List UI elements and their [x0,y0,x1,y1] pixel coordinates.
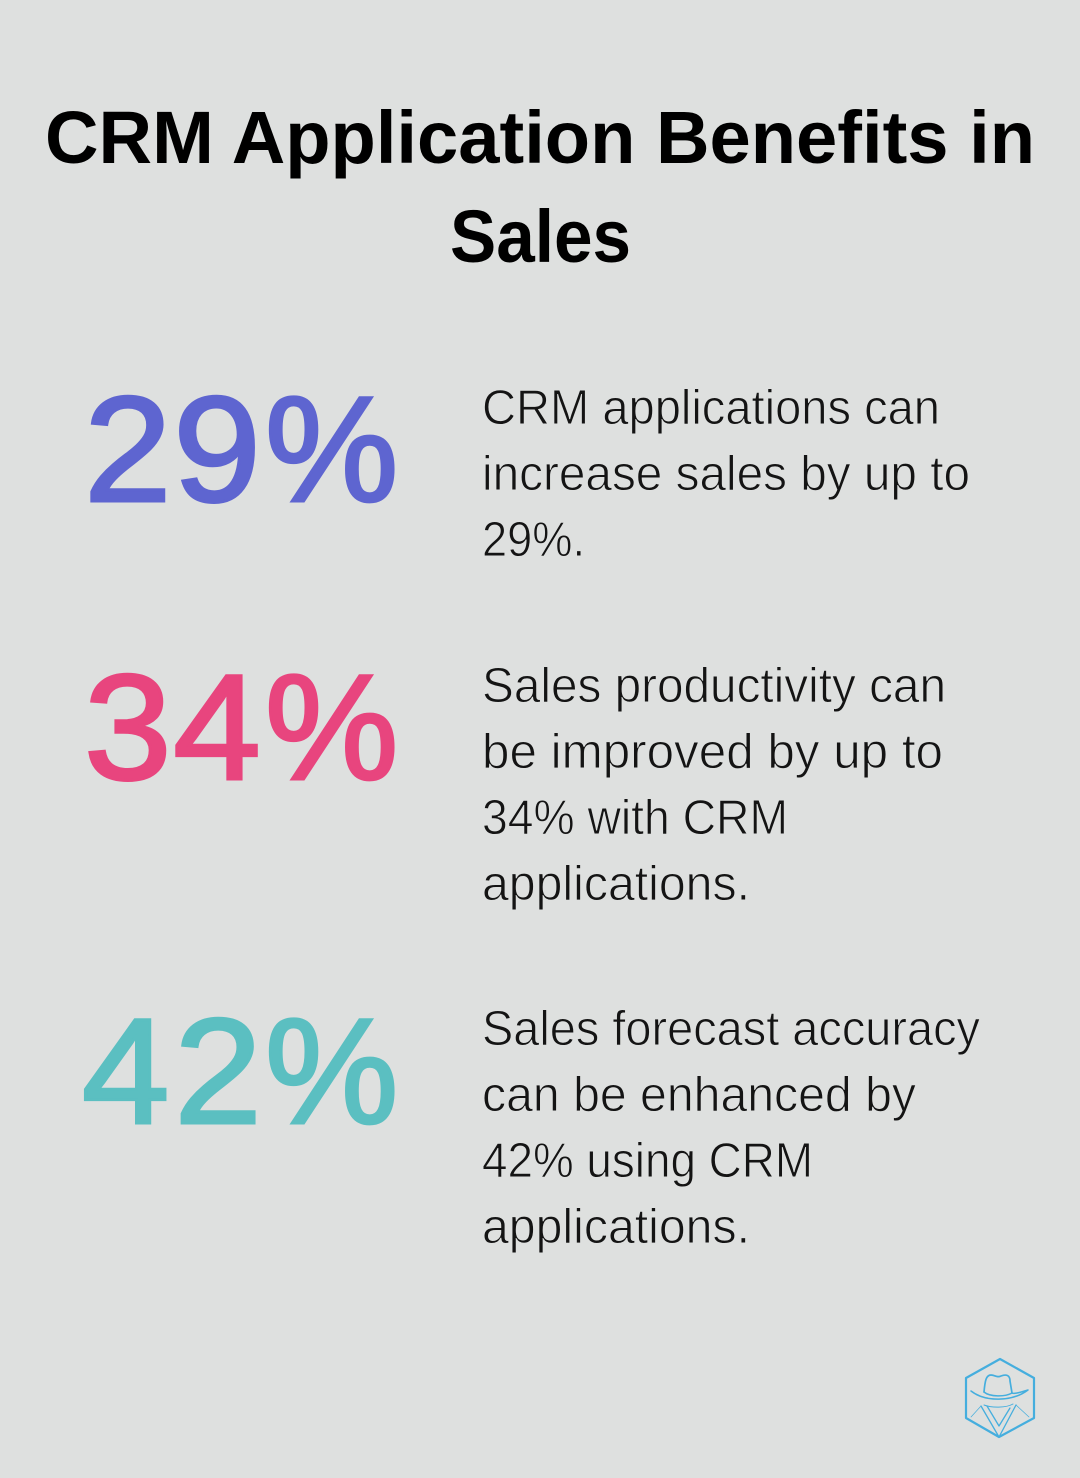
number: 34%: 34 [84,643,261,811]
title: Sales [450,195,631,278]
number: 42%: 42 [82,987,262,1155]
text: forecast accuracy: Sales forecast accuracy [482,1002,980,1056]
text: increase sales [482,381,970,567]
text: sales productivity [482,659,946,911]
number: 29% [84,365,398,533]
text: sales productivity: Sales productivity can [482,659,946,713]
text: forecast accuracy: applications. [482,1200,750,1254]
number: 42%: % [265,987,398,1155]
text: forecast accuracy [482,1002,980,1254]
title [45,96,1035,278]
number: 29%: % [265,365,398,533]
number: 29%: 29 [84,365,261,533]
text: increase sales: increase sales by up to [482,447,970,501]
text: sales productivity: be improved by up to [482,725,943,779]
text: sales productivity: 34% with CRM [482,791,788,845]
title: CRM Application Benefits in [45,96,1035,179]
number: 34%: % [265,643,398,811]
text: increase sales: CRM applications can [482,381,940,435]
stat row: 42% [82,987,980,1254]
stat row: 34% [84,643,946,911]
stat row: 29% [84,365,970,567]
text: sales productivity: applications. [482,857,750,911]
text: increase sales: 29%. [482,513,585,567]
number: 42% [82,987,398,1155]
number: 34% [84,643,398,811]
text: forecast accuracy: 42% using CRM [482,1134,813,1188]
text: forecast accuracy: can be enhanced by [482,1068,916,1122]
icon: spy logo hexagon [966,1359,1034,1437]
